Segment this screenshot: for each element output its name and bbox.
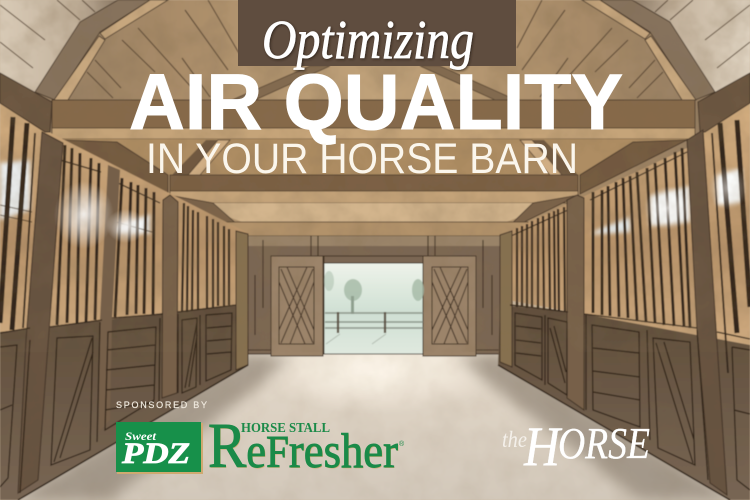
second cross beam [170, 175, 578, 191]
logo: the Horse: ORSE [558, 419, 650, 468]
ceiling bay under tie beam [63, 139, 687, 176]
upper stall wall left [0, 100, 248, 340]
logo: the Horse: the [502, 427, 527, 452]
sill rails right [510, 305, 750, 339]
stall bars right [511, 120, 750, 373]
main tie beam [52, 100, 695, 128]
logo: Sweet PDZ badge: PDZ [121, 437, 190, 470]
title banner [238, 0, 516, 66]
trees [324, 271, 424, 314]
inner truss bands [232, 66, 330, 100]
watercolor grain upper [0, 0, 750, 352]
roof corner left [0, 0, 168, 100]
logo: registered mark: ® [399, 440, 405, 448]
title line: AIR QUALITY: AIR QUALITY [129, 57, 623, 146]
ceiling braces [172, 140, 578, 175]
header beam right [698, 73, 750, 132]
right wall [498, 73, 750, 500]
window glows [54, 166, 748, 249]
third cross beam [222, 222, 528, 236]
floor [0, 330, 750, 500]
stall panels left [0, 313, 248, 500]
logo: Sweet PDZ badge: Sweet [125, 431, 157, 443]
sponsored by label: SPONSORED BY [116, 400, 207, 410]
stall panels right [498, 313, 750, 500]
end wall [247, 236, 502, 354]
lower stall wall left [0, 304, 248, 500]
window light right [593, 168, 742, 234]
stall bars left [0, 117, 229, 330]
roof boards [0, 0, 750, 98]
sill rails left [0, 305, 236, 333]
header beam left [0, 73, 52, 132]
sponsor logo: Sweet PDZ Horse Stall ReFresher: ReFresher [208, 411, 398, 481]
logo: Sweet PDZ badge [116, 422, 203, 474]
posts left [18, 132, 63, 493]
logo: the Horse [502, 416, 650, 478]
logo: HORSE STALL: HORSE STALL [241, 420, 330, 435]
roof corner right [582, 0, 750, 100]
door opening and outdoor view [324, 256, 424, 354]
logo: ReFresher: ReFresher [209, 412, 399, 482]
window light left [0, 160, 150, 234]
third ceiling bay [190, 203, 560, 224]
fence [325, 313, 423, 344]
ceiling [0, 0, 750, 240]
watercolor grain floor [0, 352, 750, 500]
upper stall wall right [508, 100, 750, 345]
lower stall wall right [498, 305, 750, 500]
logo: the Horse: H [523, 416, 562, 478]
posts right [687, 130, 727, 495]
title line: Optimizing: Optimizing [262, 9, 474, 70]
sponsor logo: Sweet PDZ Horse Stall ReFresher [116, 411, 405, 482]
title line: IN YOUR HORSE BARN: IN YOUR HORSE BARN [146, 135, 578, 183]
left wall [0, 73, 248, 500]
sliding doors [271, 256, 476, 356]
